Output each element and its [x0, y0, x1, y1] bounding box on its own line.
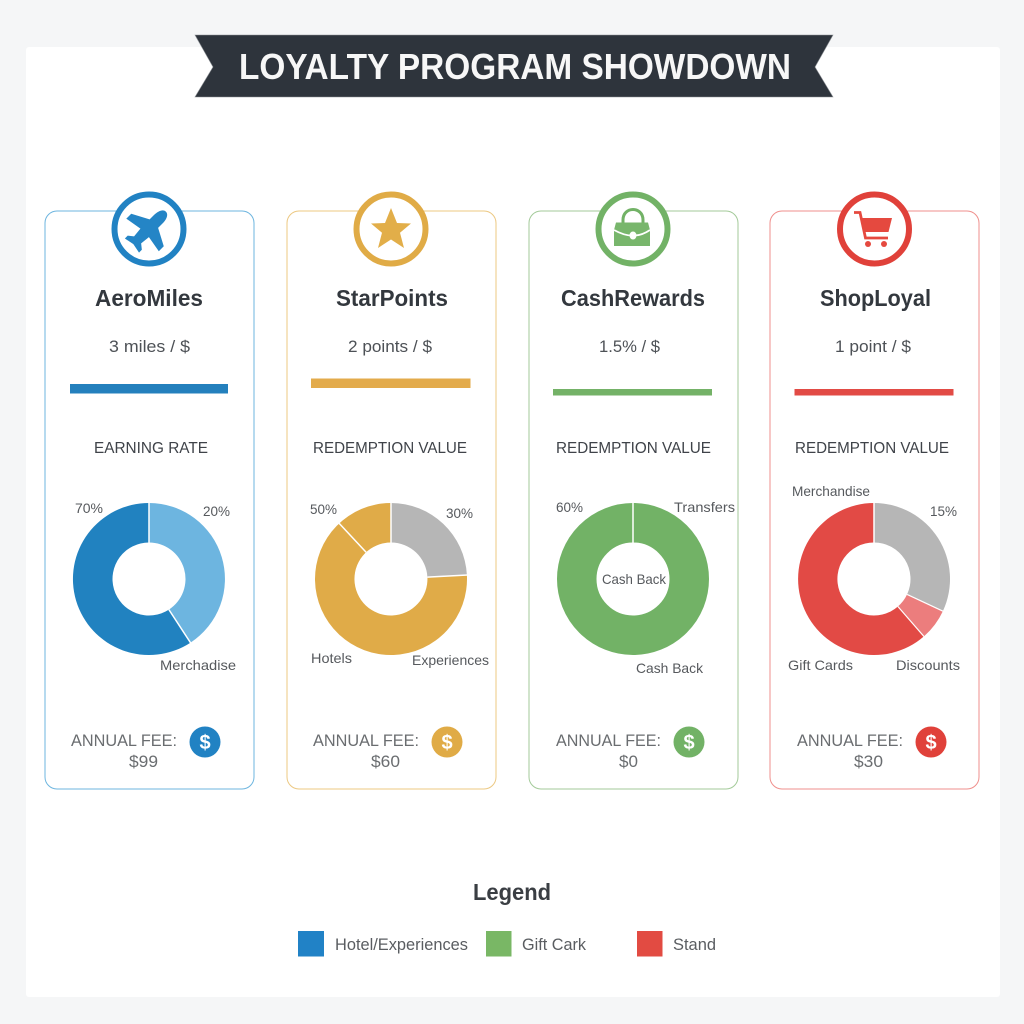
donut chart [315, 502, 468, 655]
annual fee: $0 [619, 752, 638, 771]
icon: airplane [114, 194, 184, 264]
donut labels: 30% [446, 505, 473, 521]
annual fee: ANNUAL FEE: [797, 731, 903, 750]
donut chart [73, 502, 225, 655]
annual fee [797, 731, 903, 771]
donut labels [310, 501, 489, 668]
donut labels: 70% [75, 500, 103, 516]
icon: dollar badge [432, 726, 462, 758]
section label: REDEMPTION VALUE [795, 440, 949, 457]
annual fee [556, 731, 661, 771]
icon: star [356, 194, 426, 264]
section label: REDEMPTION VALUE [556, 440, 711, 457]
earning rate value: 1 point / $ [835, 337, 912, 356]
panel: ShopLoyal [770, 194, 979, 789]
legend item: Stand: Stand [673, 935, 716, 954]
legend item: Hotel/Experiences: Hotel/Experiences [335, 935, 468, 954]
annual fee [71, 731, 177, 771]
icon: dollar badge: $ [441, 732, 453, 754]
donut labels: Cash Back [636, 660, 704, 676]
section label: EARNING RATE [94, 440, 208, 457]
legend item: Hotel/Experiences [298, 931, 468, 956]
rate bar [311, 378, 470, 388]
section label: REDEMPTION VALUE [313, 440, 467, 457]
donut labels [788, 483, 960, 673]
annual fee: ANNUAL FEE: [313, 731, 419, 750]
donut labels: Experiences [412, 652, 489, 668]
legend item: Gift Cark [486, 931, 586, 956]
annual fee: $30 [854, 752, 883, 771]
rate bar [794, 389, 954, 396]
annual fee: ANNUAL FEE: [556, 731, 661, 750]
legend title: Legend [473, 879, 551, 905]
program name: CashRewards [561, 285, 705, 311]
panel: AeroMiles [45, 194, 254, 789]
icon: shopping bag [598, 194, 668, 264]
rate bar [553, 389, 712, 396]
donut labels: Hotels [311, 650, 352, 666]
earning rate value: 3 miles / $ [109, 337, 191, 356]
earning rate value: 2 points / $ [348, 337, 433, 356]
icon: dollar badge [190, 726, 220, 758]
icon: dollar badge: $ [683, 732, 695, 754]
legend item: Stand [637, 931, 716, 956]
donut labels: 20% [203, 503, 230, 519]
donut labels: 50% [310, 501, 337, 517]
donut labels: Merchadise [160, 657, 236, 673]
panel: CashRewards [529, 194, 738, 789]
annual fee: $60 [371, 752, 400, 771]
program name: StarPoints [336, 285, 448, 311]
legend item: Gift Cark: Gift Cark [522, 935, 586, 954]
annual fee: ANNUAL FEE: [71, 731, 177, 750]
donut chart [798, 502, 950, 655]
icon: dollar badge: $ [199, 732, 211, 754]
earning rate value: 1.5% / $ [599, 337, 661, 356]
donut labels: Discounts [896, 657, 960, 673]
donut labels: Merchandise [792, 483, 870, 499]
donut labels [556, 499, 735, 676]
rate bar [70, 384, 228, 394]
annual fee [313, 731, 419, 771]
icon: dollar badge [674, 726, 704, 758]
annual fee: $99 [129, 752, 158, 771]
donut labels [75, 500, 236, 673]
donut labels: Cash Back [602, 571, 667, 587]
donut labels: 60% [556, 499, 583, 515]
icon: dollar badge [916, 726, 946, 758]
icon: shopping cart [840, 194, 909, 264]
legend [298, 879, 716, 956]
title banner [195, 35, 833, 97]
donut labels: Gift Cards [788, 657, 853, 673]
panel: StarPoints [287, 194, 496, 789]
title banner: LOYALTY PROGRAM SHOWDOWN [239, 46, 791, 87]
donut chart [577, 502, 689, 635]
icon: dollar badge: $ [925, 732, 937, 754]
donut labels: Transfers [674, 499, 735, 515]
program name: AeroMiles [95, 285, 203, 311]
donut labels: 15% [930, 503, 957, 519]
program name: ShopLoyal [820, 285, 931, 311]
